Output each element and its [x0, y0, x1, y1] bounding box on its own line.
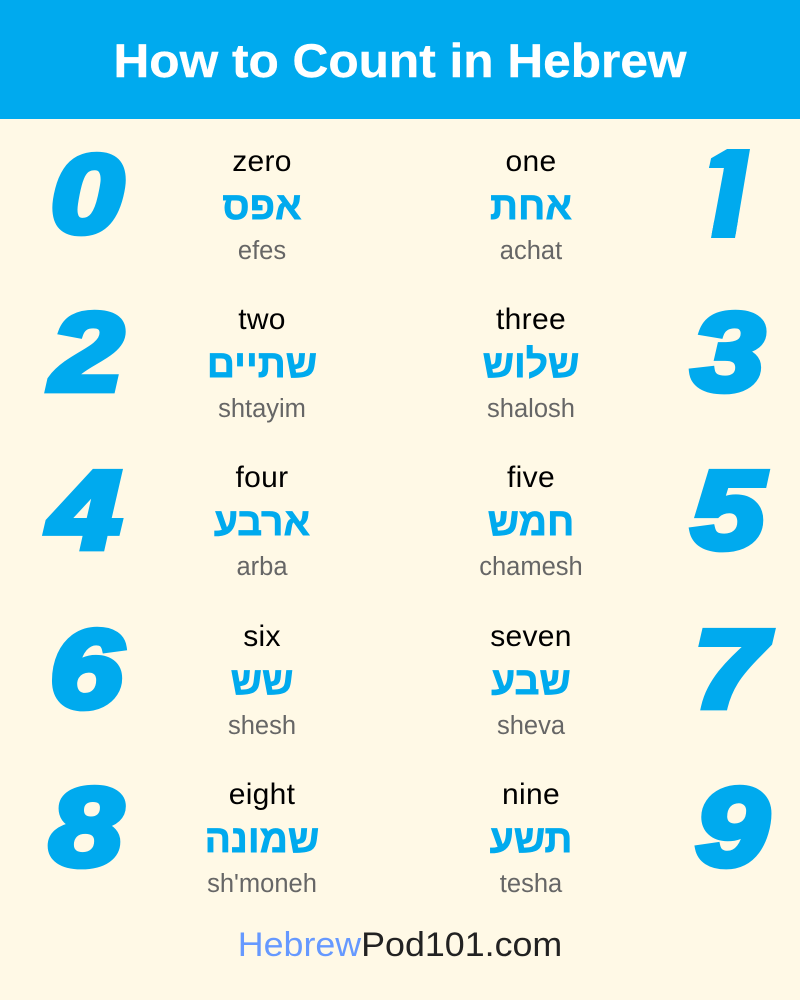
- entry: four: ארבע: [214, 501, 310, 544]
- entry: four: arba: [236, 553, 288, 581]
- numeral 5: 5: [692, 448, 764, 572]
- numeral 0: 0: [51, 132, 123, 256]
- numeral 2: 2: [51, 290, 123, 414]
- numeral 4: 4: [49, 448, 121, 572]
- entry: two: shtayim: [218, 395, 306, 423]
- entry: three: [483, 303, 579, 423]
- entry: one: one: [506, 145, 556, 178]
- entry: one: אחת: [490, 185, 572, 228]
- entry: six: six: [243, 620, 281, 653]
- entry: nine: [490, 778, 572, 898]
- entry: three: three: [496, 303, 566, 336]
- entry: six: shesh: [228, 712, 296, 740]
- entry: eight: [205, 778, 319, 898]
- entry: nine: תשע: [490, 818, 572, 861]
- entry: seven: שבע: [491, 660, 571, 703]
- entry: four: [214, 461, 310, 581]
- entry: three: shalosh: [487, 395, 575, 423]
- title: How to Count in Hebrew: [113, 35, 686, 88]
- entry: zero: אפס: [222, 185, 302, 228]
- header band: [0, 0, 800, 119]
- entry: five: [479, 461, 583, 581]
- entry: zero: zero: [232, 145, 292, 178]
- entry: zero: efes: [238, 237, 286, 265]
- entry: one: [490, 145, 572, 265]
- entry: five: חמש: [488, 501, 574, 544]
- entry: one: achat: [500, 237, 562, 265]
- entry: six: [228, 620, 296, 740]
- numeral 9: 9: [696, 765, 768, 889]
- entry: nine: nine: [502, 778, 560, 811]
- entry: seven: seven: [490, 620, 572, 653]
- entry: two: two: [238, 303, 286, 336]
- entry: seven: sheva: [497, 712, 565, 740]
- entry: eight: שמונה: [205, 818, 319, 861]
- entry: zero: [222, 145, 302, 265]
- entry: eight: sh'moneh: [207, 870, 317, 898]
- entry: three: שלוש: [483, 343, 579, 386]
- entry: five: chamesh: [479, 553, 583, 581]
- numeral 3: 3: [692, 290, 764, 414]
- entry: two: שתיים: [207, 343, 317, 386]
- entry: four: four: [236, 461, 288, 494]
- entry: six: שש: [231, 660, 293, 703]
- numeral 1: 1: [693, 129, 757, 259]
- footer brand: HebrewPod101.com: [238, 926, 562, 964]
- numeral 8: 8: [50, 765, 122, 889]
- entry: two: [207, 303, 317, 423]
- entry: eight: eight: [229, 778, 295, 811]
- entry: five: five: [507, 461, 555, 494]
- numeral 6: 6: [50, 607, 122, 731]
- entry: nine: tesha: [500, 870, 562, 898]
- numeral 7: 7: [694, 607, 766, 731]
- entry: seven: [490, 620, 572, 740]
